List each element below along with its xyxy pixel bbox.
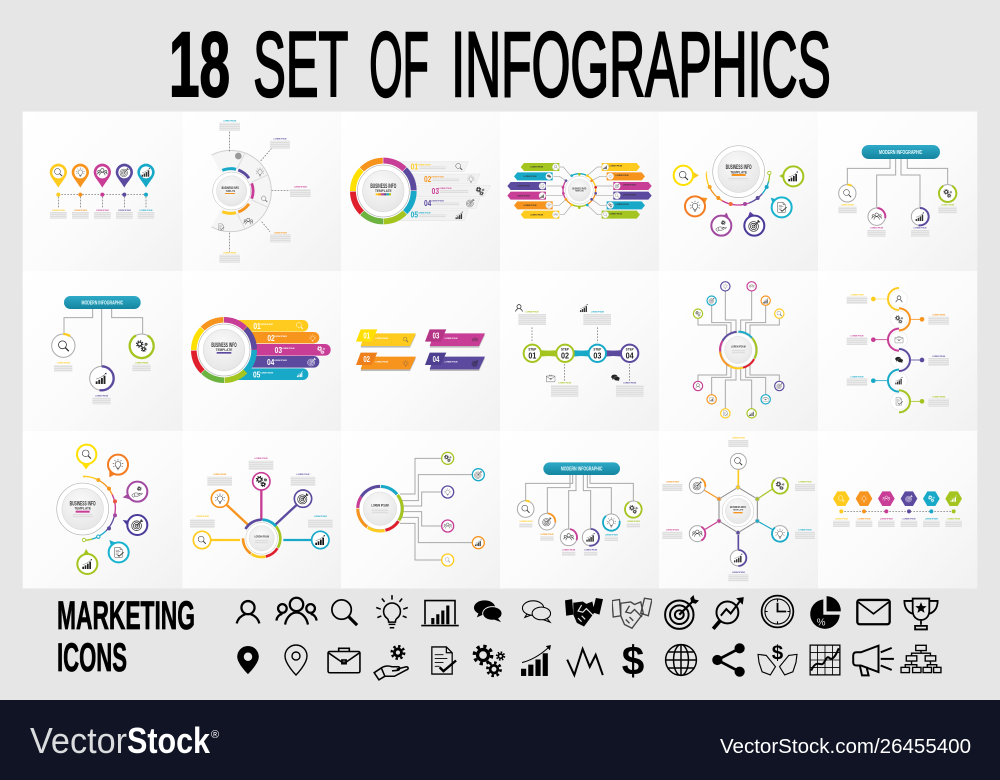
node icons: [692, 458, 785, 562]
captions: LOREM IPSUM: [196, 516, 209, 518]
dotted timeline: [839, 509, 956, 513]
chain connectors: [537, 349, 625, 357]
captions: [190, 458, 333, 528]
ribbon 04: [425, 353, 485, 371]
panel 5: hub with six speech bubbles below: [659, 112, 818, 271]
step labels: STEP: [528, 347, 537, 351]
pill header: MODERN INFOGRAPHIC: [879, 150, 922, 156]
panel 2: half wheel: [176, 112, 341, 271]
colored arc: [38, 463, 129, 554]
ribbon captions: [418, 164, 468, 217]
right ribbons: LOREM IPSUM: [616, 204, 629, 206]
tab numbers and captions: 01: [253, 321, 261, 331]
wheel icons: [218, 153, 267, 230]
captions: LOREM IPSUM: [925, 519, 938, 521]
colored ring: [340, 148, 426, 234]
timeline with dots: [56, 193, 148, 208]
footer logo: [30, 720, 219, 761]
hub with dotted ring: [557, 168, 602, 212]
ribbon 01: [356, 329, 416, 348]
side connectors: [873, 299, 922, 401]
hexagons: [833, 491, 962, 506]
panel 8: ring with colored tabs: [182, 271, 341, 431]
node arcs: [839, 181, 960, 226]
captions: LOREM IPSUM: [835, 519, 848, 521]
arc segments: [888, 308, 910, 412]
ribbon 03: 03: [433, 331, 439, 341]
callouts: LOREM IPSUM: [223, 253, 237, 255]
arc dots: [82, 476, 117, 542]
captions: LOREM IPSUM: [95, 395, 109, 397]
hub with dotted ring: TEMPLATE: [575, 190, 585, 193]
node icons: [522, 505, 638, 542]
left ribbons: [507, 163, 559, 219]
right ribbons: LOREM IPSUM: [623, 185, 636, 187]
marketing icons heading: ICONS: [57, 636, 127, 680]
branch nodes: [442, 452, 484, 566]
node arcs: [52, 330, 158, 390]
ribbons: [397, 162, 491, 221]
colored arc: [693, 129, 783, 218]
tab numbers and captions: 02: [267, 333, 275, 343]
outer nodes: [193, 473, 329, 549]
captions: LOREM IPSUM: [914, 228, 927, 230]
captions: LOREM IPSUM: [858, 519, 871, 521]
callouts: LOREM IPSUM: [274, 232, 287, 234]
left ribbons: LOREM IPSUM: [530, 214, 544, 216]
captions: LOREM IPSUM: [605, 534, 618, 536]
step labels: [528, 347, 634, 361]
panel 10: four step chain: [500, 271, 659, 431]
tab numbers and captions: LOREM IPSUM: [260, 324, 273, 326]
leader lines: [532, 327, 630, 382]
end dots: [871, 297, 924, 404]
right ribbons: LOREM IPSUM: [609, 213, 623, 215]
ribbon captions: LOREM IPSUM: [431, 200, 444, 202]
footer bar: [0, 700, 1000, 780]
captions: LOREM IPSUM: [732, 572, 745, 574]
captions: [838, 204, 957, 237]
circuit lines: [698, 291, 779, 409]
tab numbers and captions: [253, 321, 295, 379]
left ribbons: LOREM IPSUM: [530, 167, 544, 169]
captions: LOREM IPSUM: [851, 295, 864, 297]
ring hub: TEMPLATE: [216, 348, 233, 352]
ring hub: BUSINESS INFO: [370, 184, 397, 190]
captions: LOREM IPSUM: [666, 529, 679, 531]
captions: [519, 521, 640, 556]
pins: [50, 164, 155, 188]
hexagon: [719, 487, 757, 533]
node arcs: [686, 475, 790, 566]
captions: LOREM IPSUM: [520, 521, 533, 523]
captions: LOREM IPSUM: [799, 529, 812, 531]
captions: LOREM IPSUM: [74, 210, 87, 212]
colored ring: [182, 308, 266, 392]
ribbon numbers: 05: [411, 210, 418, 220]
captions: LOREM IPSUM: [541, 534, 554, 536]
callout leaders: [229, 132, 290, 252]
icon row 2: [237, 638, 941, 684]
panel 6: org chart with four nodes: [818, 112, 977, 271]
node icons: [844, 190, 952, 221]
captions: LOREM IPSUM: [941, 204, 955, 206]
ring hub: TEMPLATE: [375, 189, 392, 193]
ribbon numbers: 04: [424, 198, 431, 208]
captions: LOREM IPSUM: [851, 335, 864, 337]
captions: LOREM IPSUM: [903, 519, 916, 521]
wheel hub: TEMPLATE: [226, 190, 235, 193]
left ribbons: LOREM IPSUM: [517, 186, 530, 188]
step labels: 03: [593, 351, 601, 361]
step labels: STEP: [626, 347, 634, 351]
ribbon numbers: 01: [411, 162, 418, 172]
arc dots: [706, 171, 771, 206]
captions: [847, 295, 949, 407]
node icons: [696, 284, 782, 416]
ribbon 04: LOREM IPSUM: [445, 361, 458, 363]
panel 3: business info ring with ribbons: [340, 112, 500, 271]
wheel hub: [212, 171, 252, 211]
step captions: [518, 311, 644, 397]
panel 9: four parallelogram ribbons: [341, 271, 500, 431]
captions: LOREM IPSUM: [932, 397, 946, 399]
left ribbons: LOREM IPSUM: [524, 205, 537, 207]
hub: BUSINESS INFO: [730, 505, 746, 509]
pill header: MODERN INFOGRAPHIC: [81, 300, 123, 306]
node arcs: [517, 498, 645, 547]
captions: LOREM IPSUM: [118, 210, 131, 212]
hub: [721, 494, 755, 528]
hub ring: [235, 512, 288, 565]
nodes: [839, 185, 956, 225]
bubble hub: [55, 482, 110, 536]
ribbon captions: LOREM IPSUM: [418, 212, 431, 214]
tab numbers and captions: LOREM IPSUM: [260, 372, 274, 374]
ring hub: [197, 323, 251, 377]
ribbon 03: LOREM IPSUM: [445, 338, 458, 340]
captions: LOREM IPSUM: [851, 376, 864, 378]
ribbon captions: LOREM IPSUM: [439, 188, 452, 190]
ribbon numbers: 03: [432, 186, 439, 196]
ribbon captions: LOREM IPSUM: [431, 176, 444, 178]
nodes: [517, 501, 642, 546]
title: OF: [369, 14, 429, 116]
marketing icons heading: MARKETING: [57, 594, 195, 638]
step captions: LOREM IPSUM: [591, 311, 604, 313]
captions: LOREM IPSUM: [57, 363, 70, 365]
ribbon 04: 04: [433, 354, 439, 364]
panel 17: hexagon hub: [659, 431, 818, 588]
bubble hub: [711, 144, 766, 199]
connector lines: [847, 159, 948, 207]
tab numbers and captions: 03: [275, 345, 282, 355]
panel 14: spoke hub with five nodes: [182, 431, 341, 588]
connectors: [546, 167, 613, 215]
bubbles: [77, 445, 147, 574]
hub with dotted ring: BUSINESS INFO: [572, 186, 586, 190]
footer logo: ®: [211, 729, 219, 741]
tab numbers and captions: LOREM IPSUM: [274, 360, 287, 362]
captions: LOREM IPSUM: [584, 549, 598, 551]
captions: LOREM IPSUM: [96, 210, 109, 212]
callouts: [219, 121, 311, 263]
bubble hub: TEMPLATE: [730, 170, 748, 174]
captions: LOREM IPSUM: [947, 519, 961, 521]
ribbon 01: LOREM IPSUM: [375, 338, 389, 340]
callouts: LOREM IPSUM: [274, 139, 287, 141]
captions: LOREM IPSUM: [932, 315, 946, 317]
ribbon icons: [456, 163, 484, 219]
tab numbers and captions: 04: [267, 357, 274, 367]
hub ring: LOREM IPSUM: [254, 534, 269, 538]
right ribbons: LOREM IPSUM: [623, 194, 636, 196]
right ribbons: [602, 163, 652, 219]
nodes: [52, 334, 154, 390]
white discs: [891, 291, 907, 410]
panel 11: circuit hub with twelve nodes: [659, 271, 818, 431]
bubble hub: BUSINESS INFO: [70, 502, 96, 508]
captions: LOREM IPSUM: [314, 516, 327, 518]
ribbon captions: LOREM IPSUM: [418, 164, 431, 166]
footer image id: VectorStock.com/26455400: [720, 736, 971, 758]
ribbon numbers: 02: [424, 174, 431, 184]
ribbon 01: 01: [363, 331, 370, 341]
footer logo: Vector: [30, 720, 127, 761]
step captions: LOREM IPSUM: [526, 311, 539, 313]
bubble hub: BUSINESS INFO: [726, 165, 752, 171]
captions: LOREM IPSUM: [213, 474, 227, 476]
node icons: [444, 455, 482, 562]
captions: LOREM IPSUM: [52, 210, 65, 212]
captions: LOREM IPSUM: [799, 482, 812, 484]
spokes: [207, 488, 315, 540]
bubbles: [674, 166, 803, 236]
step captions: LOREM IPSUM: [623, 383, 637, 385]
captions: LOREM IPSUM: [880, 519, 893, 521]
ring hub: [356, 164, 411, 218]
panel 16: org chart with six nodes: [500, 431, 659, 588]
serpentine arcs: [888, 288, 899, 310]
panel 1: map pin timeline: [23, 112, 182, 271]
ribbon 02: [356, 353, 416, 371]
captions: LOREM IPSUM: [135, 362, 149, 364]
captions: LOREM IPSUM: [870, 228, 884, 230]
tab icons: [296, 322, 325, 377]
callouts: LOREM IPSUM: [294, 187, 307, 189]
right ribbons: LOREM IPSUM: [616, 175, 629, 177]
panel 4: twelve ribbons around a hub: [500, 112, 659, 271]
right ribbons: LOREM IPSUM: [609, 166, 623, 168]
outer nodes: [689, 453, 788, 566]
step labels: STEP: [561, 347, 570, 351]
hexagon icons: [838, 495, 957, 502]
ribbon 03: [425, 329, 485, 348]
captions: LOREM IPSUM: [255, 458, 268, 460]
ribbon numbers: [411, 162, 439, 220]
step labels: 02: [561, 351, 569, 361]
tab numbers and captions: LOREM IPSUM: [282, 348, 295, 350]
hexagon vertices: [717, 485, 759, 535]
panel 12: serpentine timeline: [818, 271, 977, 431]
captions: LOREM IPSUM: [562, 549, 576, 551]
step labels: 01: [528, 351, 536, 361]
branch lines: [400, 458, 472, 560]
tab numbers and captions: LOREM IPSUM: [274, 336, 287, 338]
title: [169, 14, 831, 116]
connector lines: [64, 309, 143, 366]
node icons: [198, 476, 325, 545]
captions: LOREM IPSUM: [140, 210, 153, 212]
captions: LOREM IPSUM: [297, 474, 310, 476]
left ribbons: LOREM IPSUM: [517, 195, 530, 197]
captions: [54, 362, 151, 404]
panel 7: org chart with three nodes: [23, 271, 182, 431]
panel 13: hub with bubbles on the right: [23, 431, 182, 588]
left ribbons: LOREM IPSUM: [524, 176, 537, 178]
ribbon 02: LOREM IPSUM: [375, 361, 389, 363]
captions: LOREM IPSUM: [627, 521, 640, 523]
step labels: STEP: [593, 347, 602, 351]
hub ring: LOREM IPSUM: [371, 503, 389, 507]
icon row 1: [237, 595, 938, 629]
tabs: [224, 320, 331, 380]
step captions: LOREM IPSUM: [558, 383, 572, 385]
captions: LOREM IPSUM: [666, 482, 679, 484]
ring hub: BUSINESS INFO: [211, 343, 237, 349]
captions: LOREM IPSUM: [841, 204, 854, 206]
bubble hub: TEMPLATE: [74, 507, 92, 511]
title: 18: [169, 14, 230, 116]
tab numbers and captions: 05: [253, 369, 260, 379]
connector lines: [526, 475, 633, 529]
outer nodes: [693, 282, 784, 418]
pill header: MODERN INFOGRAPHIC: [561, 467, 603, 473]
callouts: LOREM IPSUM: [223, 121, 237, 123]
wheel hub: BUSINESS INFO: [222, 186, 239, 190]
disc icons: [895, 296, 903, 405]
panel 18: hexagon timeline: [818, 431, 977, 588]
hub ring: LOREM IPSUM: [731, 344, 746, 348]
spokes: [704, 468, 773, 550]
step circles: [524, 345, 638, 362]
captions: LOREM IPSUM: [732, 438, 745, 440]
footer logo: Stock: [127, 720, 211, 761]
captions: [833, 519, 962, 527]
captions: LOREM IPSUM: [932, 356, 946, 358]
step labels: 04: [626, 351, 634, 361]
title: SET: [253, 14, 348, 116]
ribbon 02: 02: [363, 354, 370, 364]
hub: TEMPLATE: [733, 509, 744, 512]
captions: [662, 438, 815, 581]
captions: [50, 210, 154, 219]
panel 15: ring with tree branches: [341, 431, 500, 588]
marketing icons heading: [57, 594, 195, 680]
node icons: [59, 341, 147, 384]
step icons: [515, 304, 620, 382]
half wheel segments: [176, 136, 286, 246]
